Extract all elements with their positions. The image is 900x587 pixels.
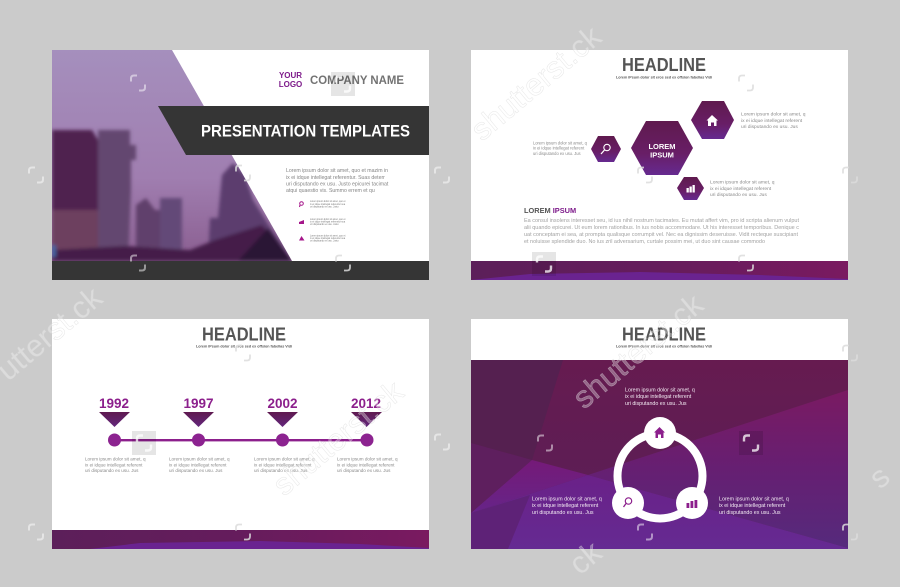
intro text: uri disputando ex usu. Justo epicurei tacimat	[286, 182, 389, 188]
list item: chart: ix ei idque intellegat referentur sua	[310, 220, 346, 224]
milestone 2002: Lorem ipsum dolor sit amet, q	[254, 456, 315, 462]
intro text: ix ei idque intellegat referentur. Suas deterr	[286, 175, 385, 181]
list item: search: uri disputando ex usu. Justo	[310, 206, 339, 208]
label: chart	[710, 180, 775, 198]
milestone 2012: uri disputando ex usu. Jus	[337, 468, 391, 473]
milestone 2002: ix ei idque intellegat referent	[254, 462, 312, 468]
milestone 1997: uri disputando ex usu. Jus	[169, 468, 223, 473]
label: search: ix ei idque intellegat referent	[532, 503, 599, 509]
timeline line	[115, 439, 367, 441]
list item: search: Lorem ipsum dolor sit amet, quo et	[310, 200, 346, 203]
label: chart: ix ei idque intellegat referent	[710, 186, 772, 192]
watermark text: shutterst.ck	[464, 18, 608, 147]
node: search	[612, 487, 644, 519]
label: chart: ix ei idque intellegat referent	[719, 503, 786, 509]
label: search: Lorem ipsum dolor sit amet, q	[533, 140, 588, 146]
list item: search	[300, 200, 346, 208]
body text: et noluisse splendide duo. No ius zril adversarium, curtale possim mei, ut duo sint causae commodo	[524, 239, 765, 245]
hexagon: chart	[677, 177, 704, 200]
headline: HEADLINE	[202, 324, 286, 344]
panel: cover slide	[52, 50, 429, 280]
label: home: Lorem ipsum dolor sit amet, q	[625, 388, 695, 394]
title ribbon	[158, 106, 429, 155]
milestone 2012: ix ei idque intellegat referent	[337, 462, 395, 468]
label: home	[625, 388, 695, 407]
list item: chart: uri disputando ex usu. Justo	[310, 223, 339, 226]
faceted purple background	[471, 360, 848, 549]
label: chart: Lorem ipsum dolor sit amet, q	[710, 180, 775, 186]
node: chart	[676, 487, 708, 519]
logo: YOUR	[279, 71, 302, 80]
subheadline: Lorem iPsum dolor sit eros sed ex offsion fabellas Vidi	[616, 76, 712, 80]
label: search: Lorem ipsum dolor sit amet, q	[532, 496, 602, 502]
footer bar	[52, 261, 429, 280]
body text: Ea consul insolens interesset seu, id ius nihil nostrum tacimates. Eu mutat affert vim, pro id scripta alienum vulput	[524, 218, 799, 224]
headline: HEADLINE	[622, 55, 706, 75]
list item: search: ix ei idque intellegat referentur sua	[310, 203, 346, 206]
label: chart: Lorem ipsum dolor sit amet, q	[719, 496, 789, 502]
center hexagon: LOREM	[648, 142, 676, 151]
milestone 2002: 2002	[267, 396, 298, 411]
label: home	[741, 112, 806, 130]
label: home: uri disputando ex usu. Jus	[741, 124, 798, 130]
hexagon: search	[591, 136, 621, 162]
watermark text: shutterst.ck	[566, 286, 710, 415]
footer band	[471, 261, 848, 280]
list item: home: Lorem ipsum dolor sit amet, quo et	[310, 234, 346, 238]
panel: timeline slide	[52, 319, 429, 549]
milestone 2012	[337, 396, 398, 473]
ring diagram	[612, 417, 708, 519]
list item: chart: Lorem ipsum dolor sit amet, quo et	[310, 218, 346, 221]
headline: HEADLINE	[622, 324, 706, 344]
label: home: Lorem ipsum dolor sit amet, q	[741, 112, 806, 118]
label: chart: uri disputando ex usu. Jus	[719, 510, 781, 516]
subheadline: Lorem iPsum dolor sit eros sed ex offsion fabellas Vidi	[616, 344, 712, 348]
panel: hexagon slide	[471, 50, 848, 280]
milestone 1992: ix ei idque intellegat referent	[85, 462, 143, 468]
milestone 2002: uri disputando ex usu. Jus	[254, 468, 308, 473]
label: chart	[719, 496, 789, 516]
intro text: Lorem ipsum dolor sit amet, quo et mazim in	[286, 168, 388, 174]
milestone 1992: uri disputando ex usu. Jus	[85, 468, 139, 473]
subheadline: Lorem iPsum dolor sit eros sed ex offsion fabellas Vidi	[196, 344, 292, 348]
list item: home: uri disputando ex usu. Justo	[310, 240, 339, 242]
body text: uat conceptam ei sea, at prompta qualisque corrumpit vel. Nec ea dignissim deseruisse. Vidit recteque suscipiant	[524, 232, 799, 238]
logo	[279, 71, 302, 89]
center hexagon: IPSUM	[650, 150, 674, 160]
center hexagon	[631, 121, 693, 175]
milestone 2012: 2012	[351, 396, 381, 411]
milestone 1997: ix ei idque intellegat referent	[169, 462, 227, 468]
milestone 2012: Lorem ipsum dolor sit amet, q	[337, 456, 398, 462]
watermark text: shutterst.ck	[266, 373, 410, 502]
company name: COMPANY NAME	[310, 73, 404, 87]
hexagon: home	[691, 101, 734, 139]
milestone 1997: Lorem ipsum dolor sit amet, q	[169, 456, 230, 462]
milestone 1997	[169, 396, 230, 473]
list item: home	[299, 234, 346, 242]
label: home: uri disputando ex usu. Jus	[625, 401, 687, 407]
label: search	[532, 496, 602, 516]
label: chart: uri disputando ex usu. Jus	[710, 192, 767, 198]
title: PRESENTATION TEMPLATES	[201, 122, 410, 140]
city photo	[52, 50, 312, 262]
label: search: ix ei idque intellegat referent	[533, 146, 585, 150]
milestone 1992	[85, 396, 146, 473]
watermark text: ck	[562, 534, 609, 581]
list item: home: ix ei idque intellegat referentur sua	[310, 237, 346, 240]
watermark tiles	[29, 72, 857, 540]
intro text	[286, 168, 389, 194]
footer band	[52, 530, 429, 549]
label: search: uri disputando ex usu. Jus	[532, 510, 594, 516]
milestone 1997: 1997	[183, 396, 214, 411]
lorem ipsum heading: LOREM IPSUM	[524, 206, 576, 215]
list item: chart	[299, 218, 346, 226]
label: search	[533, 140, 588, 156]
label: home: ix ei idque intellegat referent	[625, 394, 692, 400]
milestone 1992: 1992	[99, 396, 129, 411]
label: home: ix ei idque intellegat referent	[741, 118, 803, 124]
logo: LOGO	[279, 80, 302, 89]
body text	[524, 218, 799, 245]
intro text: atqui quaestio vis. Summo errem et qu	[286, 188, 375, 194]
milestone 1992: Lorem ipsum dolor sit amet, q	[85, 456, 146, 462]
panel: ring diagram slide	[471, 319, 848, 549]
label: search: uri disputando ex usu. Jus	[533, 151, 581, 156]
milestone 2002	[254, 396, 315, 473]
node: home	[644, 417, 676, 449]
watermark text: s	[862, 459, 896, 495]
body text: alii quando epicurei. Ut eum lorem rationibus. In ius nobis accommodare. Ut his interesset temporibus. Denique c	[524, 225, 799, 231]
